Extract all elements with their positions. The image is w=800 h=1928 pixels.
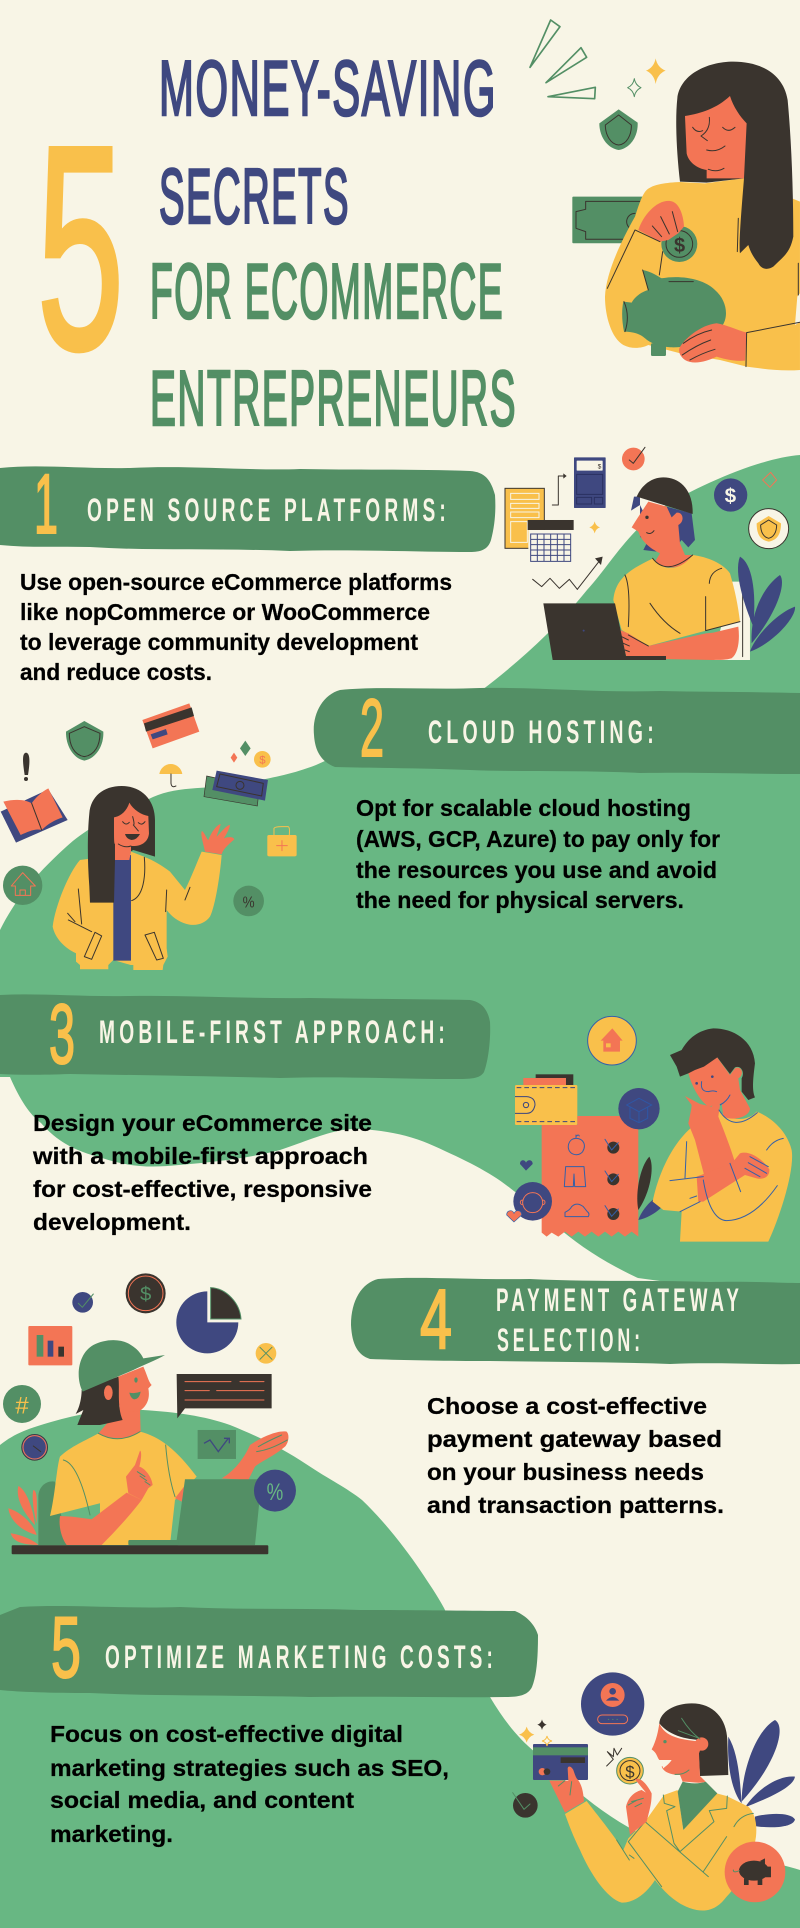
face (113, 1367, 152, 1412)
text block: step 5 (50, 1721, 449, 1847)
text block: step 3: development. (33, 1209, 191, 1235)
arrow up (552, 473, 567, 505)
cap (79, 1340, 165, 1392)
text block: step 4: Choose a cost-effective (427, 1393, 707, 1419)
turtleneck (678, 1782, 717, 1830)
icon: calculator (574, 457, 606, 508)
arm (620, 627, 739, 660)
text block: step 1: to leverage community development (20, 629, 418, 655)
icon: percent badge: % (267, 1479, 283, 1506)
hair (659, 1703, 728, 1776)
neck (98, 1407, 141, 1438)
panel: step 3 banner (0, 987, 490, 1081)
hand to chin (685, 1096, 738, 1178)
blue hair (631, 497, 695, 552)
plant leaves (738, 557, 795, 652)
coin (661, 226, 697, 262)
icon: dark check badge (513, 1793, 538, 1818)
laptop (543, 603, 666, 660)
zigzag growth arrow (533, 557, 603, 589)
text block: step 5: social media, and content (50, 1787, 354, 1813)
illustration: man with receipt (507, 1016, 792, 1242)
icon: calculator: $ (598, 464, 602, 471)
speech bubble (177, 1374, 272, 1418)
text block: step 3: with a mobile-first approach (32, 1143, 368, 1169)
text block: step 4 (427, 1393, 724, 1518)
icon: book (1, 788, 68, 843)
icon: percent badge (254, 1470, 296, 1512)
icon: orange heart (507, 1211, 522, 1222)
ear (695, 1737, 708, 1751)
icon: hash badge: # (15, 1392, 29, 1419)
eye and smile (645, 516, 654, 533)
face features (118, 817, 145, 847)
step 4 heading (496, 1282, 743, 1358)
step number 1: 1 (34, 457, 58, 551)
step 2 heading: CLOUD HOSTING: (428, 714, 658, 750)
step 1 heading: OPEN SOURCE PLATFORMS: (87, 492, 450, 528)
text block: step 2: the need for physical servers. (356, 887, 684, 913)
icon: credit card (142, 703, 199, 748)
icon: dollar badge: $ (725, 485, 737, 508)
step number 5: 5 (51, 1600, 81, 1696)
woman body (565, 1703, 756, 1911)
laptop (176, 1479, 262, 1545)
icon: small line chart (198, 1430, 236, 1459)
man body (653, 1028, 792, 1242)
icon: graduation badge (618, 1088, 660, 1129)
cap hair (637, 477, 693, 514)
hand holding card (549, 1767, 584, 1813)
icon: hash badge (3, 1385, 41, 1423)
collar panel (131, 852, 145, 901)
icon: dollar badge: $ (140, 1285, 152, 1306)
icon: medical bag (267, 827, 297, 856)
icon: baby badge (513, 1182, 552, 1221)
icon: clock (22, 1434, 48, 1460)
step number 2: 2 (360, 683, 384, 774)
icon: x badge (256, 1343, 276, 1364)
hair (76, 1377, 123, 1425)
pointing hand (126, 1451, 153, 1500)
text block: step 5: marketing. (50, 1821, 173, 1847)
shirt lines (670, 1110, 783, 1221)
icon: shield badge (749, 509, 789, 549)
sleeve lines (607, 218, 798, 295)
shirt lines (622, 555, 740, 652)
text block: step 2: Opt for scalable cloud hosting (356, 795, 691, 821)
eye and hair strands (663, 1718, 700, 1774)
illustration: woman with card and coin (513, 1672, 795, 1911)
receipt icons (564, 1135, 589, 1217)
text block: step 1: and reduce costs. (20, 659, 212, 685)
t-shirt (50, 1432, 197, 1545)
icon: percent badge (233, 886, 264, 916)
icon: shield (599, 109, 638, 150)
icon: zigzag (607, 1748, 622, 1766)
text block: step 2: (AWS, GCP, Azure) to pay only for (356, 826, 720, 852)
icon: dollar badge (714, 478, 747, 512)
icon: diamond (763, 472, 777, 487)
title line: money-saving: MONEY-SAVING (159, 44, 497, 132)
icon: sparkles (519, 1719, 552, 1746)
icon: bar chart (28, 1326, 72, 1365)
waving hand (201, 824, 234, 854)
shirt seams (63, 1432, 175, 1515)
receipt (542, 1116, 638, 1237)
icon: check badge (72, 1292, 93, 1313)
step 3 heading: MOBILE-FIRST APPROACH: (99, 1014, 449, 1050)
chair (38, 1481, 67, 1545)
laptop base (128, 1540, 178, 1545)
icon: check badge (622, 447, 645, 470)
navy shirt (113, 855, 131, 961)
forearm (697, 1153, 769, 1202)
small arm piece (175, 1483, 187, 1502)
text block: step 4: and transaction patterns. (427, 1492, 724, 1518)
icon: house badge (588, 1016, 636, 1065)
green background blob: upper (0, 455, 800, 1300)
panel: step 1 banner (0, 457, 495, 552)
text block: step 2: the resources you use and avoid (356, 857, 717, 883)
illustration: woman with piggy bank (530, 20, 800, 370)
hair (676, 62, 793, 269)
text block: step 1: Use open-source eCommerce platforms (20, 569, 452, 595)
arm (60, 1493, 142, 1545)
plant (8, 1486, 38, 1545)
icon: money stack (204, 771, 268, 806)
green background blob: lower (0, 1410, 800, 1928)
icon: calendar (528, 520, 574, 562)
receipt checks (605, 1139, 619, 1220)
face (114, 803, 149, 860)
icon: credit card (533, 1744, 588, 1780)
text block: step 1: like nopCommerce or WooCommerce (20, 599, 430, 625)
icon: gold coin: $ (625, 1762, 635, 1781)
illustration: person at laptop (505, 447, 795, 660)
illustration: person with cap and charts (3, 1273, 296, 1554)
hand with finger (626, 1779, 652, 1835)
title: SECRETS (159, 152, 350, 240)
text block: step 3 (32, 1110, 372, 1235)
icon: document (505, 488, 544, 548)
hair (670, 1028, 755, 1100)
jacket seams (68, 857, 190, 960)
icon: banknote (572, 197, 651, 243)
icon: burst triangles (530, 20, 595, 99)
step 4 heading: SELECTION: (497, 1322, 644, 1358)
pie chart (176, 1288, 241, 1353)
icon: plant (728, 1720, 795, 1827)
woman body (53, 786, 234, 970)
text block: step 4: payment gateway based (427, 1426, 722, 1452)
lower hand (679, 322, 800, 367)
icon: dollar badge (126, 1273, 166, 1313)
icon: percent badge: % (243, 894, 255, 911)
mouth (660, 1760, 672, 1768)
icon: sparkles and coin: $ (259, 755, 266, 767)
person (50, 1340, 288, 1545)
icon: navy heart (520, 1160, 533, 1171)
jacket (53, 852, 222, 970)
chair (713, 582, 750, 660)
eye and smile (129, 1377, 141, 1399)
text block: step 5: Focus on cost-effective digital (50, 1721, 403, 1747)
icon: exclamation mark (23, 753, 29, 781)
icon: sparkle (589, 521, 600, 533)
illustration: woman waving (1, 703, 297, 970)
jacket (565, 1790, 756, 1911)
hair (88, 786, 155, 903)
icon: shield (66, 721, 103, 761)
big number 5: 5 (37, 86, 124, 410)
step 5 heading: OPTIMIZE MARKETING COSTS: (105, 1639, 497, 1675)
step number 3: 3 (49, 987, 75, 1081)
icon: piggy badge (725, 1842, 785, 1902)
text block: step 3: Design your eCommerce site (33, 1110, 372, 1136)
t-shirt (613, 555, 740, 646)
text block: step 2 (356, 795, 720, 913)
face (632, 502, 692, 567)
icon: gold coin (617, 1757, 643, 1784)
icon: sparkles and coin (231, 741, 271, 768)
plant leaves (637, 1157, 673, 1220)
shirt (653, 1110, 792, 1242)
text block: step 1 (20, 569, 452, 685)
face (685, 96, 747, 178)
icon: profile badge (581, 1672, 644, 1736)
desk (12, 1545, 268, 1554)
icon: sparkles (628, 58, 666, 97)
icon: wallet (515, 1074, 577, 1125)
face and neck (688, 1057, 750, 1119)
panel: step 2 banner (314, 683, 800, 774)
face features (693, 117, 735, 171)
title (37, 44, 517, 442)
right arm and hand (222, 1431, 288, 1480)
icon: house badge (3, 866, 42, 905)
sweater (605, 178, 800, 370)
text block: step 3: for cost-effective, responsive (33, 1176, 372, 1202)
face features (695, 1075, 730, 1105)
jacket seams (617, 1795, 753, 1887)
panel: step 5 banner (0, 1600, 538, 1697)
step number 4: 4 (420, 1272, 452, 1366)
text block: step 5: marketing strategies such as SEO, (50, 1755, 449, 1781)
panel: step 4 banner (351, 1272, 800, 1366)
coin: $ (674, 235, 685, 257)
hand with coin (638, 201, 684, 242)
piggy bank (622, 270, 726, 356)
face (652, 1723, 706, 1783)
text block: step 4: on your business needs (427, 1459, 704, 1485)
ear (104, 1385, 113, 1400)
icon: umbrella (159, 764, 182, 787)
